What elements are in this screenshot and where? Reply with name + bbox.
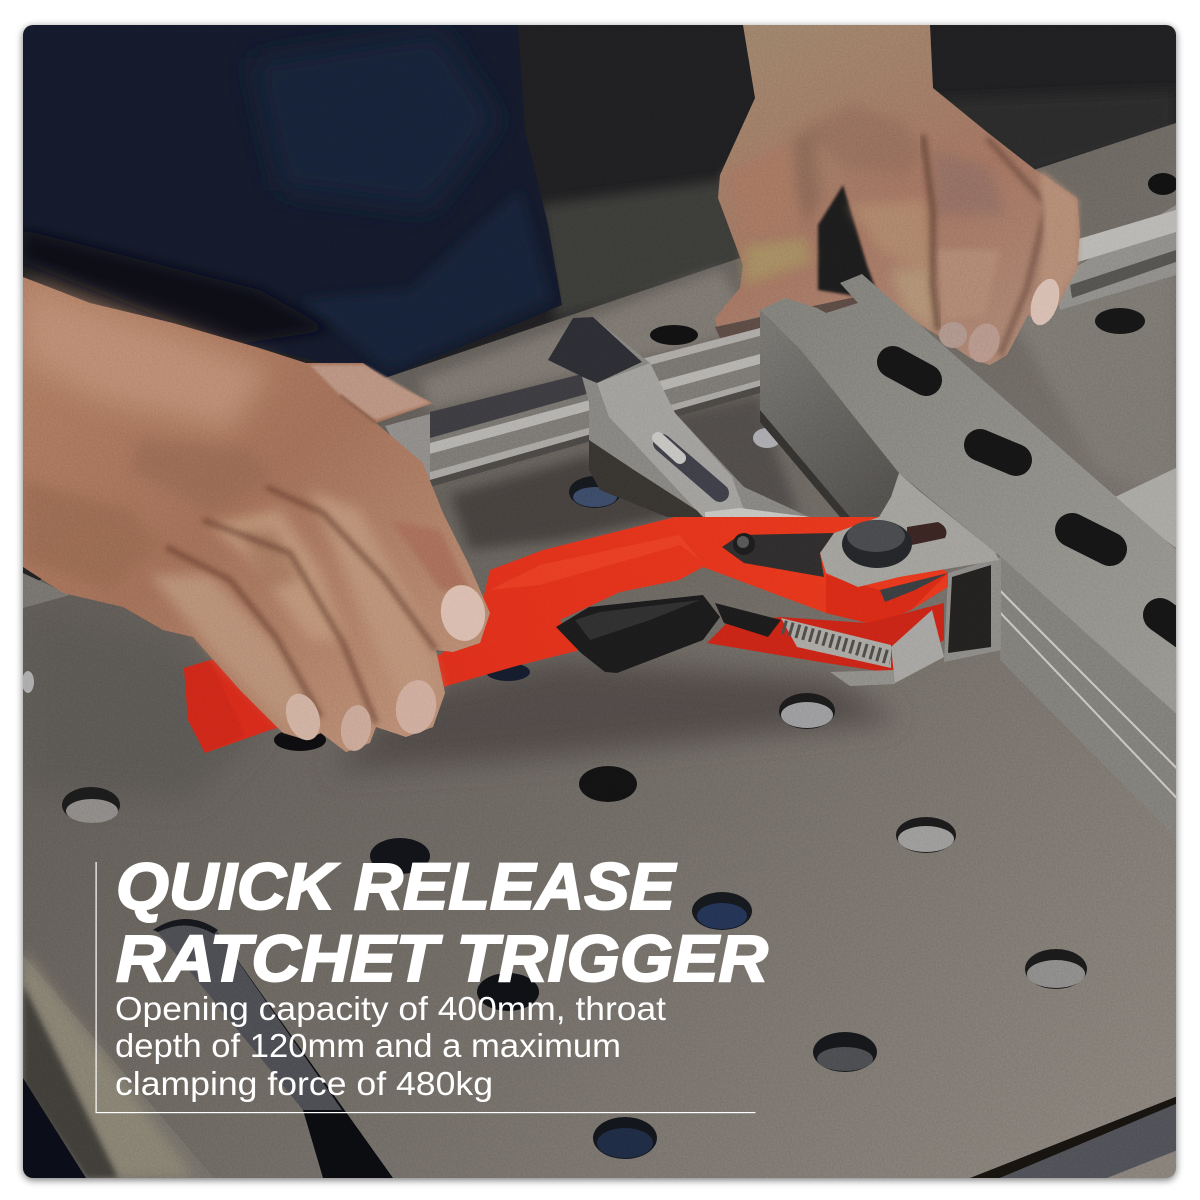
shirt bbox=[23, 25, 562, 378]
description text: depth of 120mm and a maximum bbox=[115, 1027, 621, 1064]
heading: RATCHET TRIGGER bbox=[116, 921, 768, 995]
description text: clamping force of 480kg bbox=[115, 1065, 493, 1102]
description text bbox=[115, 990, 666, 1102]
nails right hand bbox=[1030, 278, 1060, 326]
grey bar end behind left hand bbox=[23, 573, 70, 608]
hand: top right bbox=[715, 25, 1080, 367]
dark link plate and rivet bbox=[722, 533, 834, 577]
heading bbox=[116, 849, 768, 995]
text frame lines bbox=[96, 862, 756, 1113]
table holes bbox=[22, 173, 1178, 1159]
heading: QUICK RELEASE bbox=[116, 849, 677, 923]
bracket plate with slot bbox=[820, 473, 999, 587]
clamp bar bbox=[385, 296, 860, 487]
right end of clamp bar bbox=[1055, 205, 1176, 548]
black release lever bbox=[556, 595, 720, 673]
lower jaw and ratchet teeth bbox=[707, 603, 944, 686]
red trigger handle bbox=[184, 517, 948, 753]
pivot bolt bbox=[842, 520, 912, 568]
hand: left on trigger bbox=[23, 277, 490, 753]
description text: Opening capacity of 400mm, throat bbox=[115, 990, 666, 1027]
floor behind the table bbox=[543, 176, 740, 320]
table front edge and long slot bbox=[23, 919, 1178, 1178]
nails left hand bbox=[440, 585, 486, 641]
sliding jaw bbox=[548, 317, 810, 522]
steel channel rail bbox=[760, 274, 1176, 799]
